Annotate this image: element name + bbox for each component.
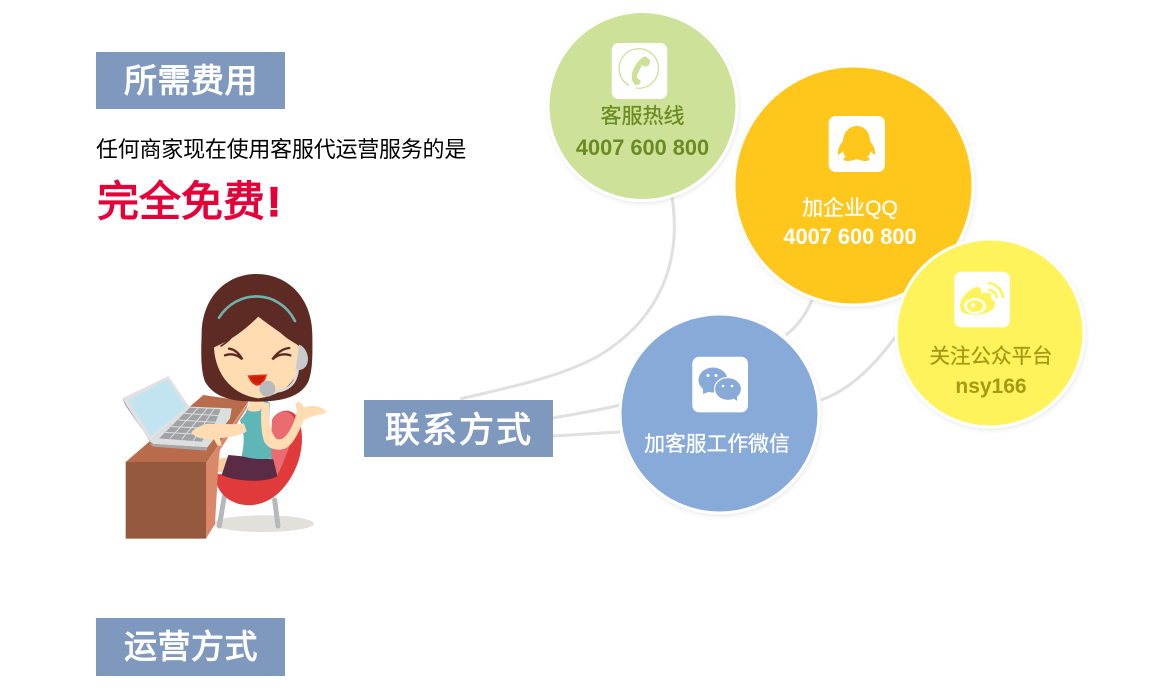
circle: official account	[896, 239, 1084, 427]
eyes	[225, 348, 290, 359]
hair	[201, 274, 312, 402]
body, chair and desk	[122, 376, 327, 539]
illustration: customer service agent at desk	[122, 274, 327, 539]
desk front	[126, 462, 206, 539]
neck	[248, 395, 265, 412]
circle: official account: nsy166	[955, 375, 1027, 398]
circle: WeChat: 加客服工作微信	[644, 433, 790, 456]
desk side	[206, 402, 248, 539]
chair	[216, 411, 302, 505]
right arm	[261, 402, 327, 450]
desk top	[126, 395, 248, 463]
torso	[240, 397, 272, 459]
leg	[215, 457, 227, 473]
heading: contact methods: 联系方式	[385, 411, 533, 450]
circle: enterprise QQ: 4007 600 800	[783, 224, 917, 249]
text block: service description: 任何商家现在使用客服代运营服务的是	[96, 137, 466, 162]
hair strands	[221, 328, 296, 346]
chair legs	[219, 497, 278, 526]
icon: telephone	[612, 43, 667, 99]
circle: hotline: 客服热线	[600, 105, 684, 128]
floor shadow	[213, 515, 314, 532]
arm on keyboard	[191, 423, 247, 446]
headband	[219, 296, 295, 321]
circle: hotline: 4007 600 800	[576, 135, 709, 160]
heading: fee	[96, 52, 285, 109]
skirt	[222, 455, 277, 481]
mouth	[248, 374, 267, 386]
circle: WeChat	[620, 314, 819, 513]
heading: fee: 所需费用	[124, 62, 258, 99]
icon: weibo	[954, 272, 1010, 327]
head	[201, 274, 312, 402]
text block: completely free: 完全免费!	[97, 178, 281, 225]
heading: operation method	[96, 618, 285, 676]
headset	[259, 345, 308, 397]
heading: operation method: 运营方式	[124, 628, 258, 665]
circle: official account: 关注公众平台	[930, 345, 1052, 368]
laptop	[122, 376, 232, 451]
circle: hotline	[548, 12, 737, 200]
icon: WeChat bubbles	[692, 357, 748, 412]
icon: QQ penguin	[829, 116, 885, 172]
heading: contact methods	[364, 400, 553, 457]
circle: enterprise QQ: 加企业QQ	[802, 197, 898, 220]
connector lines	[460, 197, 896, 436]
face	[214, 317, 302, 398]
circle: enterprise QQ	[734, 66, 973, 305]
